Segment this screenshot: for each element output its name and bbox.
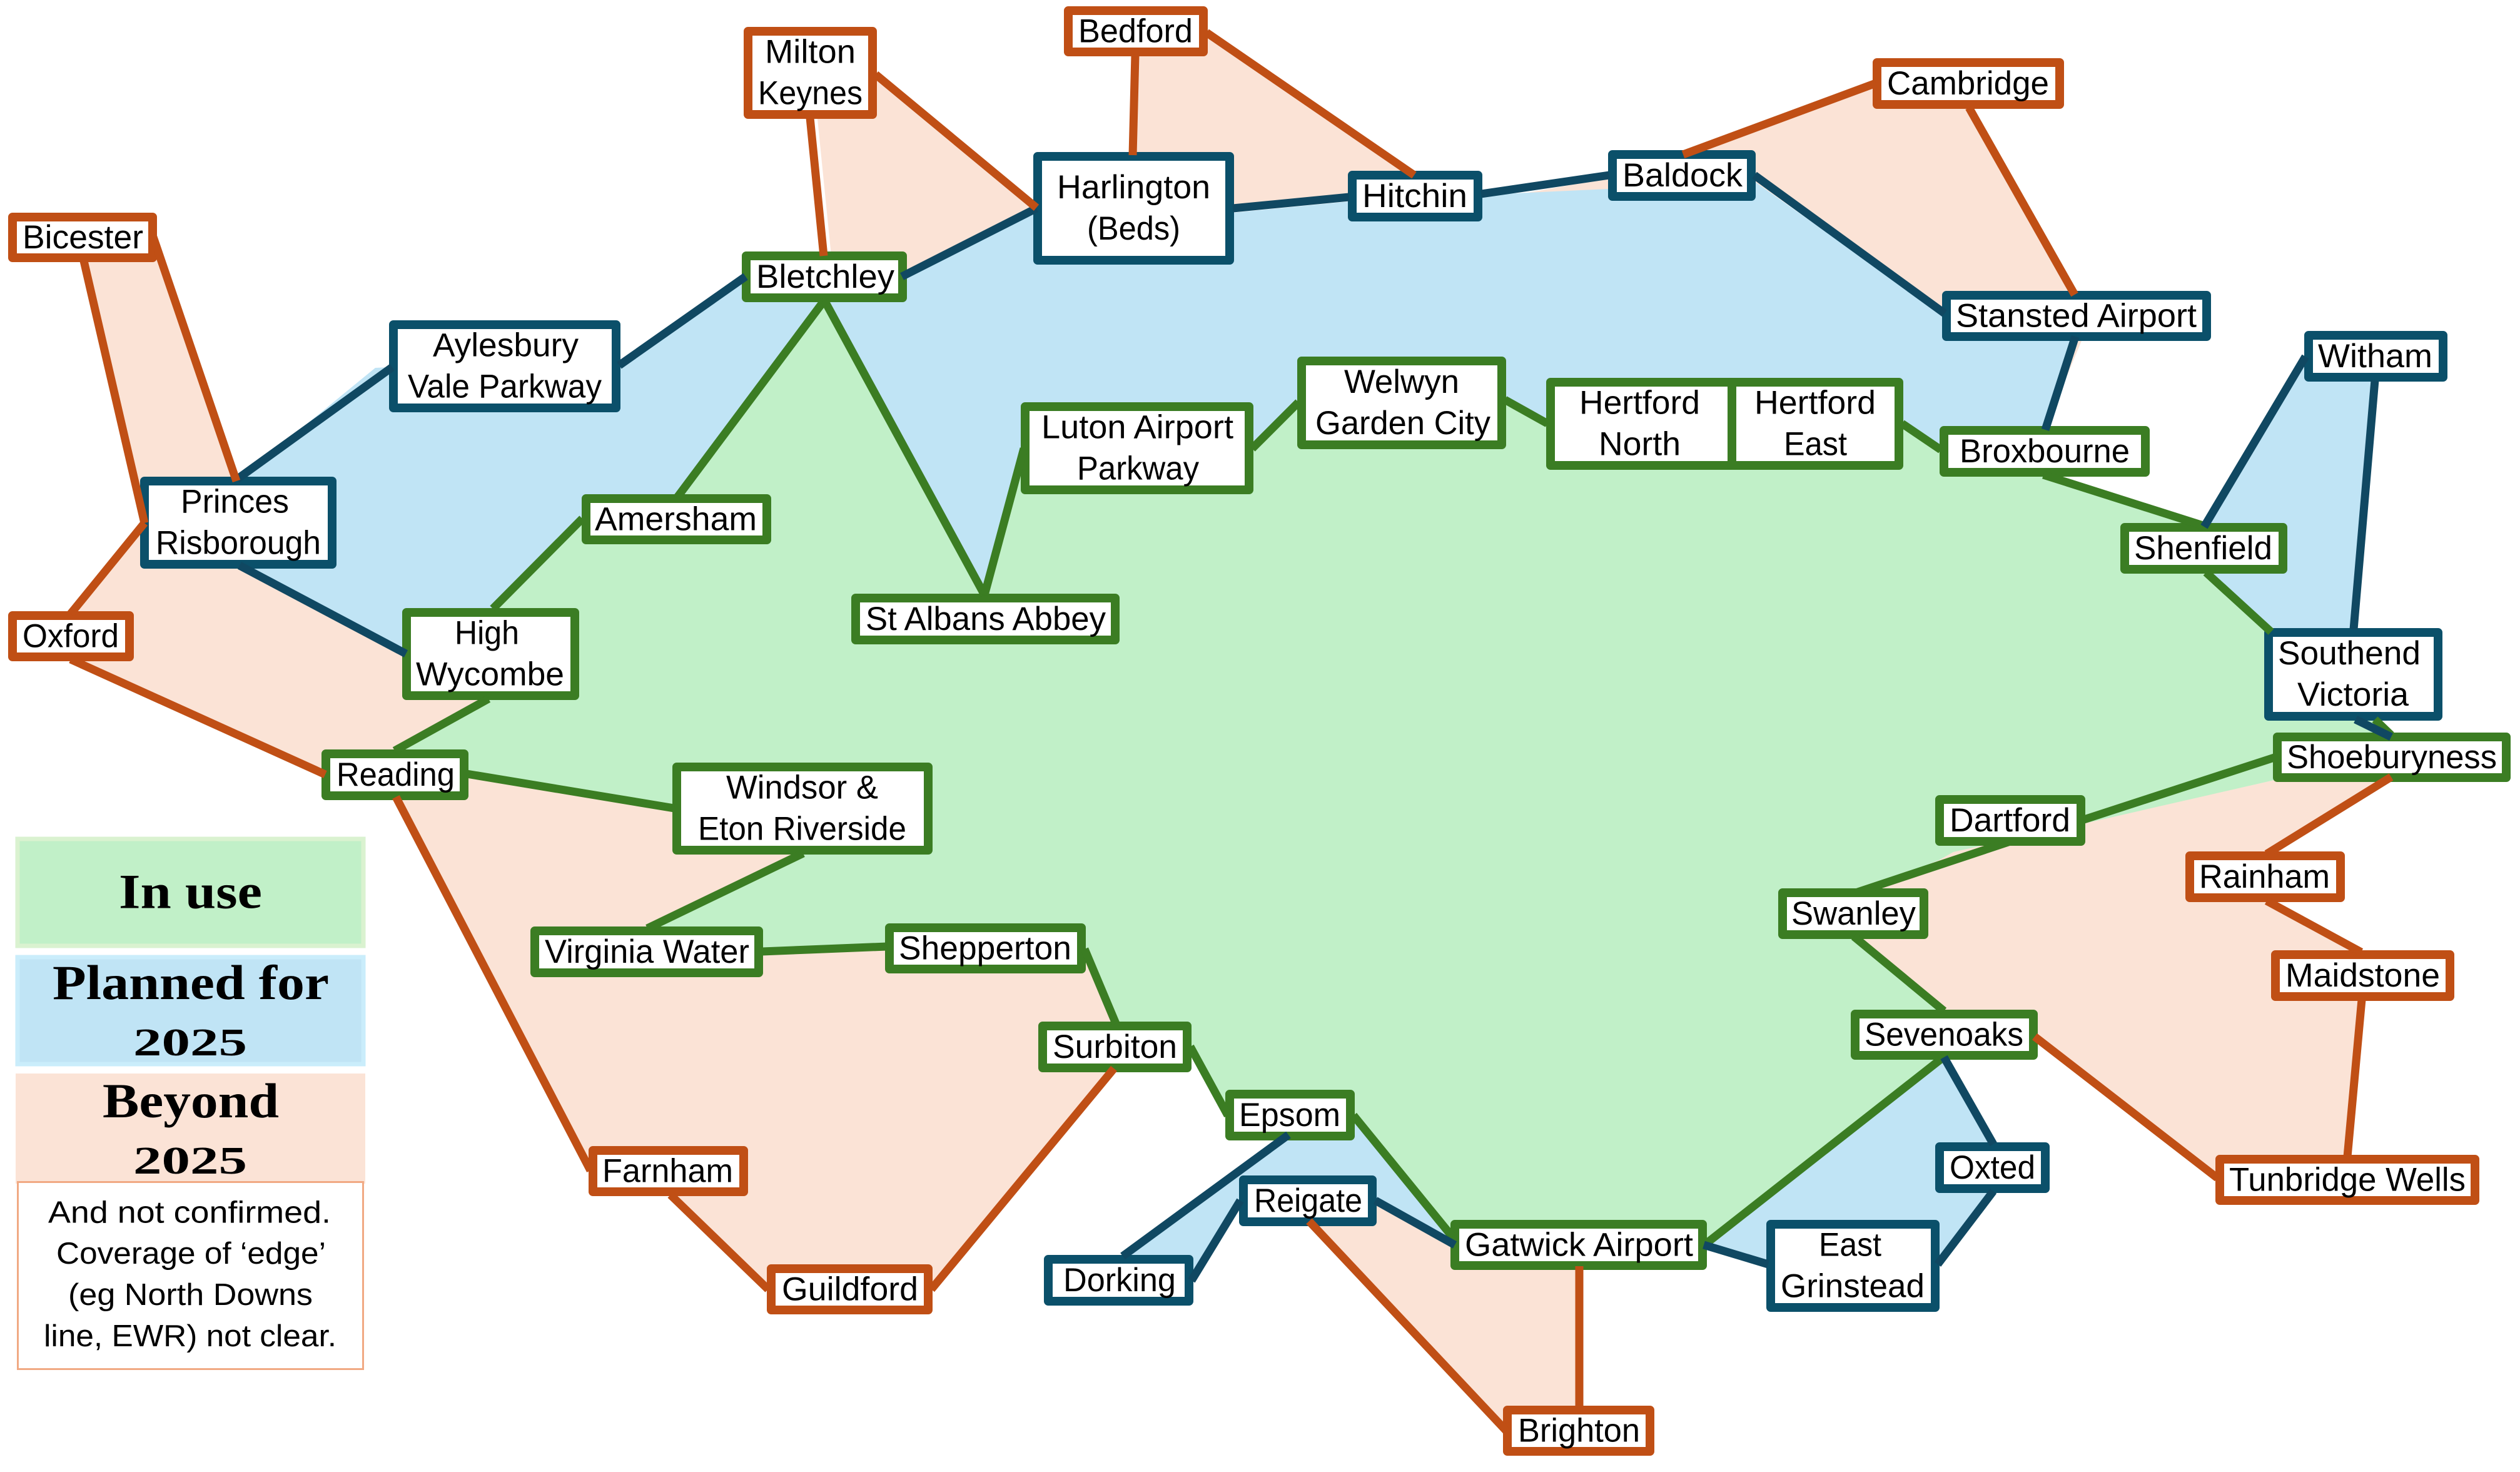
station: Bicester: Bicester <box>23 219 143 256</box>
area: north planned <box>240 181 2075 654</box>
station: Reigate: Reigate <box>1254 1182 1362 1219</box>
connector lines: in use <box>395 300 2391 1245</box>
area: Bedford beyond <box>1133 33 1414 208</box>
legend: beyond 2025: 2025 <box>133 1140 247 1182</box>
station: Princes Risborough <box>144 481 332 564</box>
legend: planned for 2025 <box>18 955 363 1064</box>
legend: note <box>18 1182 363 1369</box>
legend: note: And not confirmed. <box>48 1196 331 1230</box>
area: south-east beyond <box>1854 777 2391 1178</box>
legend: in use <box>18 839 363 946</box>
station: Gatwick Airport: Gatwick Airport <box>1465 1226 1693 1264</box>
station: Welwyn Garden City: Welwyn <box>1344 363 1459 400</box>
station: Surbiton: Surbiton <box>1053 1028 1177 1065</box>
station: East Grinstead: Grinstead <box>1781 1267 1925 1305</box>
station: Maidstone: Maidstone <box>2285 957 2440 994</box>
station: Luton Airport Parkway: Parkway <box>1077 450 1199 487</box>
station: Dorking: Dorking <box>1063 1262 1176 1299</box>
station: Broxbourne: Broxbourne <box>1960 433 2130 470</box>
station: Hertford North: Hertford <box>1579 384 1700 422</box>
station: Hertford North <box>1551 382 1732 465</box>
station: Dartford: Dartford <box>1950 802 2070 839</box>
station: Rainham: Rainham <box>2199 858 2330 895</box>
station: Southend Victoria <box>2269 632 2438 716</box>
legend: note: Coverage of ‘edge’ <box>56 1237 326 1271</box>
station: Stansted Airport: Stansted Airport <box>1956 298 2197 334</box>
station: Milton Keynes <box>748 31 873 114</box>
station: Swanley: Swanley <box>1791 895 1916 932</box>
station: Hertford North: North <box>1599 425 1681 463</box>
station: Epsom: Epsom <box>1239 1097 1340 1134</box>
station: Virginia Water: Virginia Water <box>545 933 749 970</box>
legend: note: (eg North Downs <box>68 1278 313 1312</box>
station: Harlington (Beds): Harlington <box>1057 169 1210 206</box>
planned for 2025 areas <box>240 181 2375 1281</box>
area: Oxted planned <box>1704 1057 1993 1264</box>
station: High Wycombe: Wycombe <box>416 656 564 693</box>
legend: planned for 2025: 2025 <box>133 1022 247 1064</box>
station: Windsor & Eton Riverside <box>677 767 928 850</box>
station: Cambridge: Cambridge <box>1887 65 2049 102</box>
station: Bletchley: Bletchley <box>756 258 895 295</box>
station: Welwyn Garden City: Garden City <box>1315 405 1490 442</box>
area: in use <box>395 304 2391 1245</box>
station: Reading: Reading <box>337 756 455 793</box>
station: Hertford East <box>1732 382 1899 465</box>
station: East Grinstead <box>1771 1224 1935 1307</box>
area: west beyond <box>71 235 488 774</box>
station: Shenfield: Shenfield <box>2134 530 2272 567</box>
station: Windsor & Eton Riverside: Windsor & <box>726 769 878 806</box>
area: Witham planned <box>2204 357 2375 632</box>
station: Luton Airport Parkway <box>1025 407 1249 490</box>
station: Hertford East: East <box>1784 425 1847 463</box>
station: Witham: Witham <box>2318 338 2432 375</box>
station: Bedford: Bedford <box>1078 13 1193 50</box>
station: Shepperton: Shepperton <box>899 930 1071 967</box>
station: Milton Keynes: Keynes <box>758 75 863 111</box>
area: Brighton beyond <box>1309 1200 1579 1431</box>
station: Harlington (Beds) <box>1038 156 1230 260</box>
station: Milton Keynes: Milton <box>765 34 856 70</box>
station: Aylesbury Vale Parkway: Vale Parkway <box>408 368 602 405</box>
station: High Wycombe: High <box>455 614 519 652</box>
area: Dorking planned <box>1123 1120 1455 1281</box>
area: Milton Keynes beyond <box>817 74 1036 277</box>
station: East Grinstead: East <box>1819 1226 1881 1264</box>
station: Shoeburyness: Shoeburyness <box>2287 739 2497 776</box>
legend: planned for 2025: Planned for <box>53 955 329 1010</box>
station: Hitchin: Hitchin <box>1362 178 1467 215</box>
area: Cambridge beyond <box>1514 83 2083 375</box>
legend: in use: In use <box>119 865 262 918</box>
station: Brighton: Brighton <box>1518 1413 1640 1449</box>
legend: beyond 2025 <box>16 1074 365 1184</box>
station: Oxford: Oxford <box>23 618 119 654</box>
station: Harlington (Beds): (Beds) <box>1087 210 1180 247</box>
legend: note: line, EWR) not clear. <box>44 1319 337 1353</box>
station: Luton Airport Parkway: Luton Airport <box>1041 409 1233 445</box>
legend: beyond 2025: Beyond <box>103 1074 279 1128</box>
station: Tunbridge Wells: Tunbridge Wells <box>2229 1161 2466 1199</box>
station: Amersham: Amersham <box>595 500 757 538</box>
station: Guildford: Guildford <box>782 1271 918 1307</box>
station: Farnham: Farnham <box>602 1152 733 1190</box>
station: Aylesbury Vale Parkway: Aylesbury <box>433 327 579 364</box>
station: Windsor & Eton Riverside: Eton Riverside <box>698 811 906 847</box>
area: south-west beyond <box>396 774 1116 1289</box>
station: Aylesbury Vale Parkway <box>393 325 616 408</box>
station: St Albans Abbey: St Albans Abbey <box>866 601 1106 637</box>
station: Hertford East: Hertford <box>1754 384 1876 422</box>
station: Baldock: Baldock <box>1622 157 1743 194</box>
station: Sevenoaks: Sevenoaks <box>1865 1016 2023 1053</box>
station: Oxted: Oxted <box>1950 1149 2035 1186</box>
station: Welwyn Garden City <box>1302 361 1502 445</box>
legend <box>16 839 365 1369</box>
station: Southend Victoria: Southend <box>2278 635 2421 672</box>
station: Princes Risborough: Risborough <box>156 524 321 562</box>
station: Southend Victoria: Victoria <box>2297 676 2409 713</box>
station: Princes Risborough: Princes <box>181 483 289 520</box>
connector lines: planned for 2025 <box>237 175 2391 1281</box>
station: High Wycombe <box>407 612 575 696</box>
